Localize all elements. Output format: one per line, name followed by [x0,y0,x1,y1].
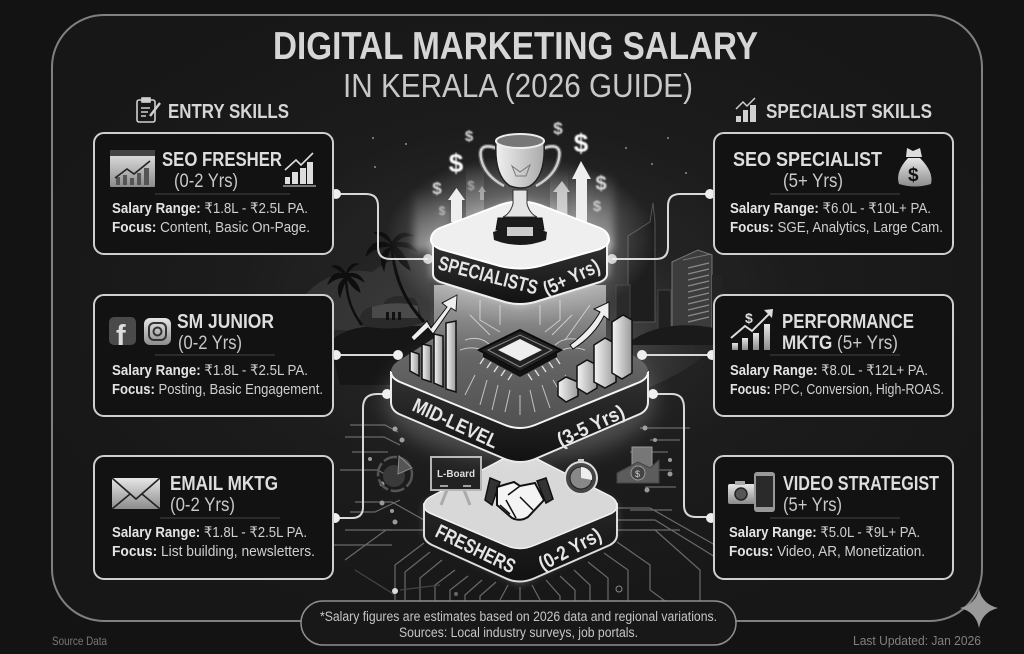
circuit traces [330,425,720,601]
panel: video strategist [714,456,953,579]
panel: SEO specialist: Salary Range: ₹6.0L - ₹10L+ PA. [730,201,931,217]
circuit on mid tier [460,300,590,415]
footnote [301,601,736,645]
icon: money bag [898,148,932,186]
icon: leaderboard easel: L-Board [437,468,475,480]
arrow: right rising [570,302,609,349]
icon: stopwatch [565,459,597,494]
heading: entry skills: ENTRY SKILLS [168,101,289,123]
icon: city skyline [616,203,722,345]
dollar signs: $ [449,148,464,178]
panel: video strategist: Focus: Video, AR, Monetization. [729,544,925,560]
panel: SM junior: Focus: Posting, Basic Engagement. [112,382,323,398]
panel: SM junior: Salary Range: ₹1.8L - ₹2.5L PA. [112,363,308,379]
panel: email marketing [94,456,333,579]
icon: dollar growth [731,309,773,350]
panel: SEO fresher [94,133,333,254]
title: IN KERALA (2026 GUIDE) [343,67,693,104]
panel: SEO fresher: SEO FRESHER [162,149,282,171]
panel: email marketing: (0-2 Yrs) [170,495,235,516]
heading: specialist skills: SPECIALIST SKILLS [766,101,932,123]
dollar signs: $ [593,198,602,215]
chart: left rising bars [410,321,456,392]
glow behind top tier [385,155,655,325]
label: 3-5 yrs: (3-5 Yrs) [554,401,628,452]
icon: money envelope: $ [635,469,640,479]
panel: video strategist: VIDEO STRATEGIST [783,473,939,495]
panel: SEO specialist: SEO SPECIALIST [733,149,882,171]
icon: envelope [112,478,160,509]
panel: SM junior [94,295,333,416]
chart: right rising bars [558,315,632,402]
icon: facebook [109,317,136,352]
heading: entry skills [137,98,289,123]
tier: mid-level [385,285,655,462]
panel: video strategist: Salary Range: ₹5.0L - ₹9L+ PA. [729,525,920,541]
dollar signs: $ [439,204,446,218]
panel: email marketing: Focus: List building, newsletters. [112,544,315,560]
label: specialists: SPECIALISTS [436,253,540,299]
icon: growth chart [736,98,756,122]
label: 5+ yrs: (5+ Yrs) [540,255,603,301]
tier: freshers [424,455,617,585]
icon: money bag: $ [908,165,919,186]
icon: money envelope [617,447,659,483]
background scene: Kerala coast and skyline [300,137,740,410]
tier: specialists [431,200,609,306]
label: mid-level: MID-LEVEL [409,395,502,453]
panel: email marketing: Salary Range: ₹1.8L - ₹2.5L PA. [112,525,307,541]
dollar signs: $ [465,128,474,145]
panel: SEO fresher: Salary Range: ₹1.8L - ₹2.5L PA. [112,201,308,217]
icon: phone [754,472,775,512]
icon: instagram [144,318,171,345]
icon: browser chart [110,150,155,187]
icon: camera [728,481,755,504]
panel: SEO fresher: Focus: Content, Basic On-Page. [112,220,310,236]
dollar signs [432,119,607,218]
icon: rising bars [283,153,316,186]
connector lines [330,189,717,523]
last updated label: Last Updated: Jan 2026 [853,634,981,648]
light beams and rising arrows [414,161,614,250]
panel: performance marketing: MKTG (5+ Yrs) [782,333,898,354]
icon: sparkle [960,589,998,628]
dollar signs: $ [553,119,563,138]
heading: specialist skills [736,98,932,123]
icon: houseboat [358,296,422,329]
panel: SEO fresher: (0-2 Yrs) [174,171,238,192]
panel: email marketing: EMAIL MKTG [170,473,278,495]
icon: leaderboard easel [431,457,481,505]
icon: facebook: f [116,320,126,352]
panel: performance marketing: Salary Range: ₹8.0L - ₹12L+ PA. [730,363,928,379]
icon: handshake [485,478,553,520]
dollar signs: $ [432,179,442,198]
panel: performance marketing: Focus: PPC, Conversion, High-ROAS. [730,382,944,398]
dollar signs: $ [595,173,607,195]
circuit nodes [368,426,672,596]
label: 0-2 yrs: (0-2 Yrs) [535,524,605,575]
icon: clipboard [137,98,160,122]
panel: SM junior: SM JUNIOR [177,311,274,333]
icon: processor chip [479,330,561,380]
panel: SEO specialist: Focus: SGE, Analytics, Large Cam. [730,220,943,236]
dollar signs: $ [467,178,475,193]
panel: SM junior: (0-2 Yrs) [178,333,242,354]
panel: SEO specialist [714,133,953,254]
arrow: left rising [411,295,457,341]
panel: performance marketing [714,295,953,416]
dollar signs: $ [574,128,589,158]
panel: SEO specialist: (5+ Yrs) [783,171,843,192]
label: freshers: FRESHERS [432,521,519,578]
icon: palm trees [328,232,424,325]
icon: pie target [378,456,412,491]
title [273,25,758,104]
footnote: *Salary figures are estimates based on 2026 data and regional variations. [320,609,717,624]
icon: dollar growth: $ [745,310,753,326]
title: DIGITAL MARKETING SALARY [273,25,758,68]
panel: performance marketing: PERFORMANCE [782,311,914,333]
panel: video strategist: (5+ Yrs) [783,495,842,516]
icon: trophy [481,134,559,245]
footnote: Sources: Local industry surveys, job portals. [399,625,638,640]
source label: Source Data [52,634,107,648]
